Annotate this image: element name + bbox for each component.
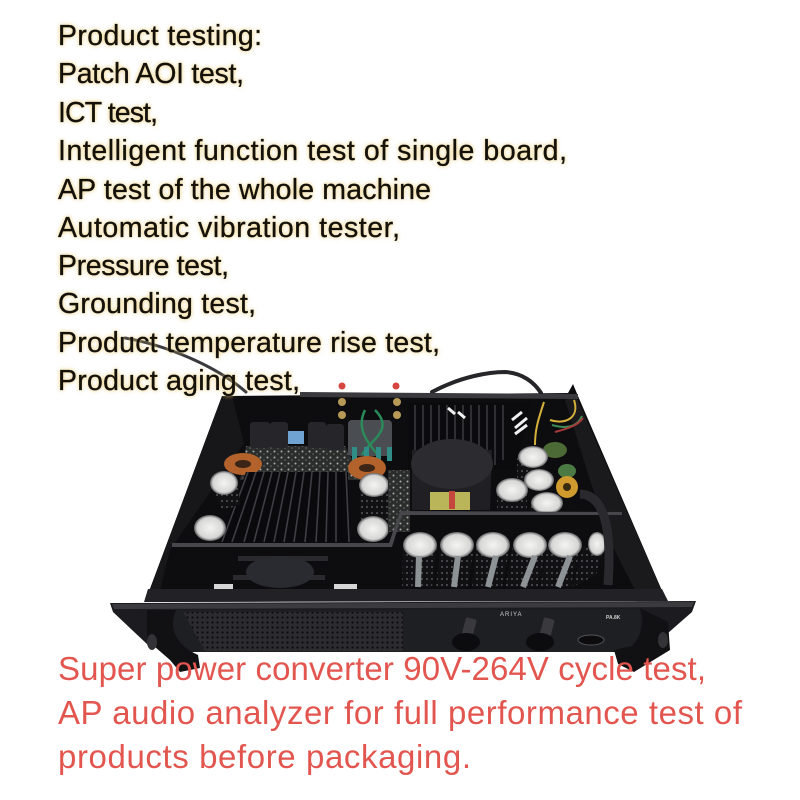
left handle — [147, 610, 200, 672]
ventilation mesh — [183, 612, 403, 651]
red note on converter and analyzer tests: products before packaging. — [58, 738, 471, 775]
red note on converter and analyzer tests: Super power converter 90V-264V cycle test, — [58, 650, 706, 687]
brand label: ARIYA — [500, 612, 523, 618]
product testing list: Product temperature rise test, — [58, 327, 440, 359]
front top lip — [144, 589, 668, 602]
red note on converter and analyzer tests: AP audio analyzer for full performance test of — [58, 694, 743, 731]
lower bank capacitors — [402, 532, 606, 587]
power amplifier photo — [110, 338, 696, 672]
product testing list: Grounding test, — [58, 288, 256, 320]
input transformer and green wires — [348, 410, 392, 461]
top rear rail — [300, 392, 578, 399]
component strip — [388, 470, 410, 532]
product testing list — [58, 20, 567, 397]
main power transformer — [411, 439, 493, 510]
cooling fan — [214, 556, 357, 589]
product testing list: Product aging test, — [58, 365, 300, 397]
product testing list: Automatic vibration tester, — [58, 212, 400, 244]
filter coils — [543, 442, 578, 498]
upper bank capacitors — [496, 446, 563, 514]
heat sink — [219, 472, 350, 543]
divider shelf — [172, 511, 622, 547]
right side wall — [565, 396, 666, 600]
rear terminals — [338, 382, 401, 419]
front knobs — [452, 617, 604, 651]
left capacitors — [194, 471, 389, 542]
circuit board — [240, 446, 362, 480]
product testing list: Pressure test, — [58, 250, 229, 282]
right handle — [614, 608, 670, 672]
rear heat sink fan — [408, 402, 530, 470]
left handle hole — [147, 634, 157, 650]
product testing list: ICT test, — [58, 97, 158, 129]
right handle hole — [658, 632, 668, 648]
product testing list: AP test of the whole machine — [58, 174, 431, 206]
red note on converter and analyzer tests — [58, 650, 743, 775]
input connectors — [250, 422, 344, 450]
product testing list: Intelligent function test of single board, — [58, 135, 567, 167]
power cable loop — [580, 494, 609, 585]
product testing list: Patch AOI test, — [58, 58, 244, 90]
model label: PA.8K — [606, 615, 621, 621]
power filter wiring — [535, 400, 583, 445]
copper toroid coils — [224, 453, 386, 480]
left side wall — [146, 396, 244, 600]
front panel — [170, 610, 640, 652]
chassis body — [145, 384, 666, 602]
product testing list: Product testing: — [58, 20, 262, 52]
power cables behind chassis — [125, 338, 541, 393]
rack ears and front rail — [110, 601, 696, 651]
